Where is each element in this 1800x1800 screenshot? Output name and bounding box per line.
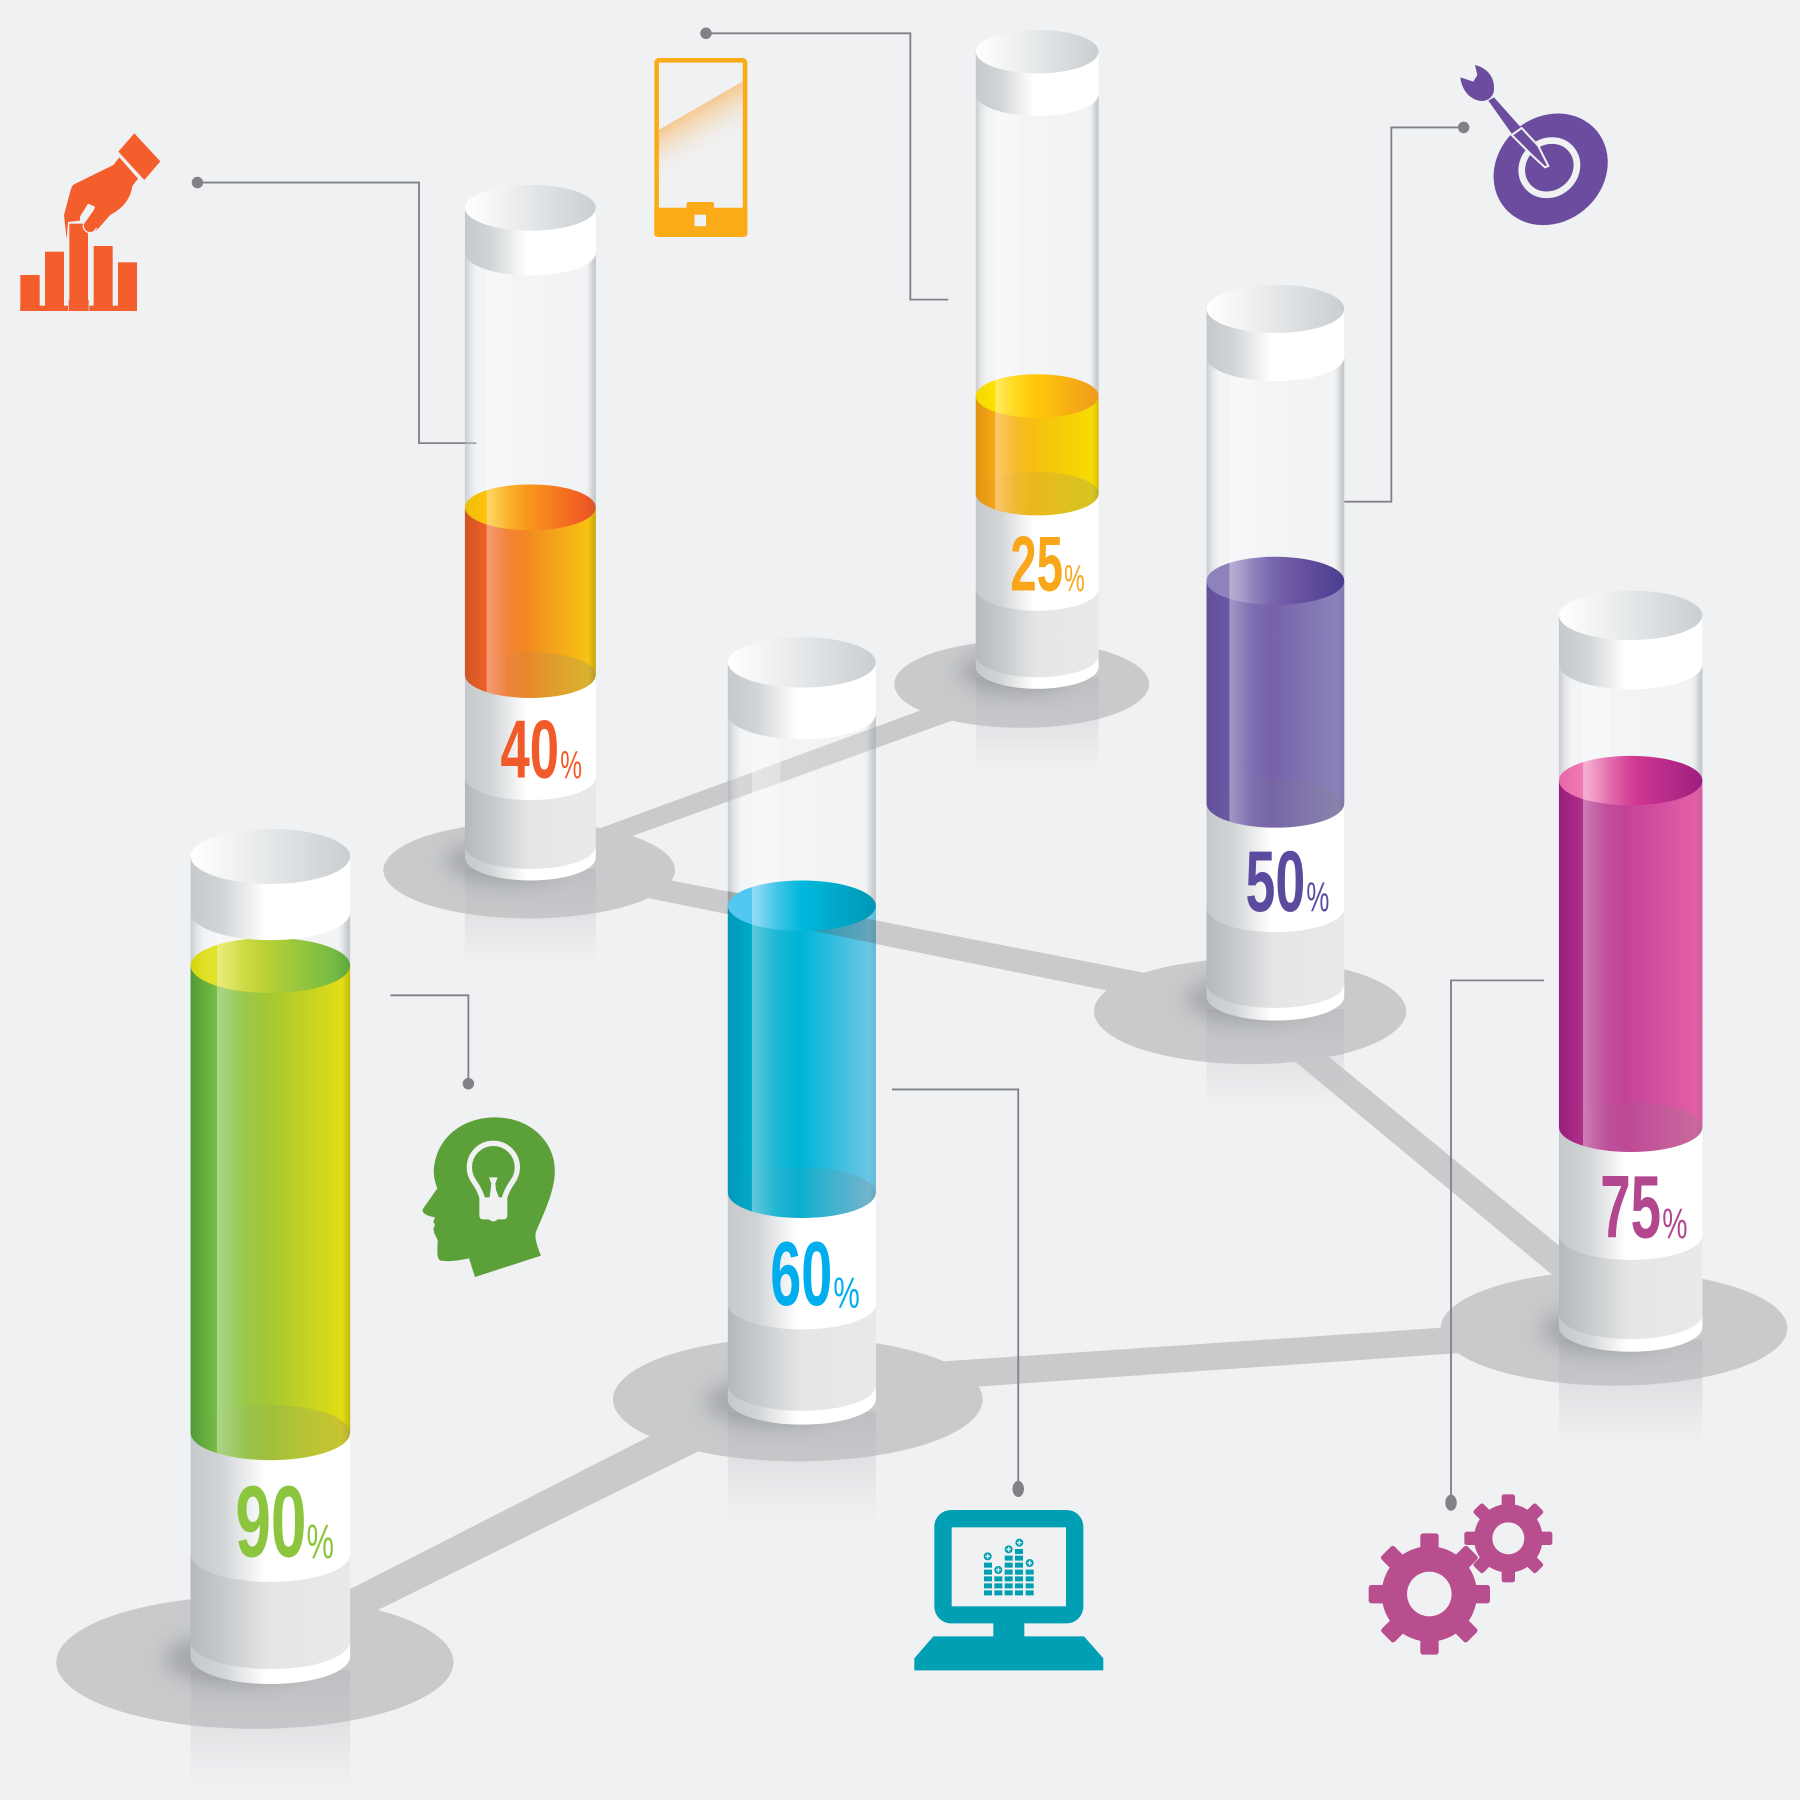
cylinder 50%: 50 <box>1246 834 1305 930</box>
cylinder 60%: 60 <box>770 1224 832 1325</box>
cylinder 25% <box>959 30 1099 771</box>
cylinder 40% <box>445 185 596 967</box>
cylinder 75%: % <box>1662 1201 1688 1248</box>
leader line dots <box>192 28 1469 1511</box>
icon: head with light bulb <box>423 1117 555 1277</box>
callout leader lines <box>197 33 1544 1503</box>
cylinder 25%: 25 <box>1010 520 1063 608</box>
cylinder 40%: 40 <box>501 703 559 796</box>
icon: hand placing bar chart <box>20 133 160 311</box>
cylinder 75% <box>1541 591 1702 1449</box>
cylinder 60% <box>705 637 876 1524</box>
icon: gears <box>1369 1494 1552 1655</box>
connecting network of floor shadows <box>56 641 1787 1729</box>
cylinder 75%: 75 <box>1600 1157 1661 1257</box>
cylinder 90%: 90 <box>235 1467 307 1579</box>
cylinder 90%: % <box>307 1515 334 1569</box>
cylinder 90% <box>164 829 350 1791</box>
cylinder 50% <box>1186 285 1344 1110</box>
icon: smartphone <box>654 60 747 236</box>
cylinder 50%: % <box>1306 874 1329 920</box>
icon: computer with chart <box>914 1510 1103 1670</box>
cylinder 60%: % <box>833 1270 860 1318</box>
cylinder 25%: % <box>1064 558 1085 600</box>
icon: dart and target <box>1460 65 1630 248</box>
cylinder 40%: % <box>560 744 582 787</box>
